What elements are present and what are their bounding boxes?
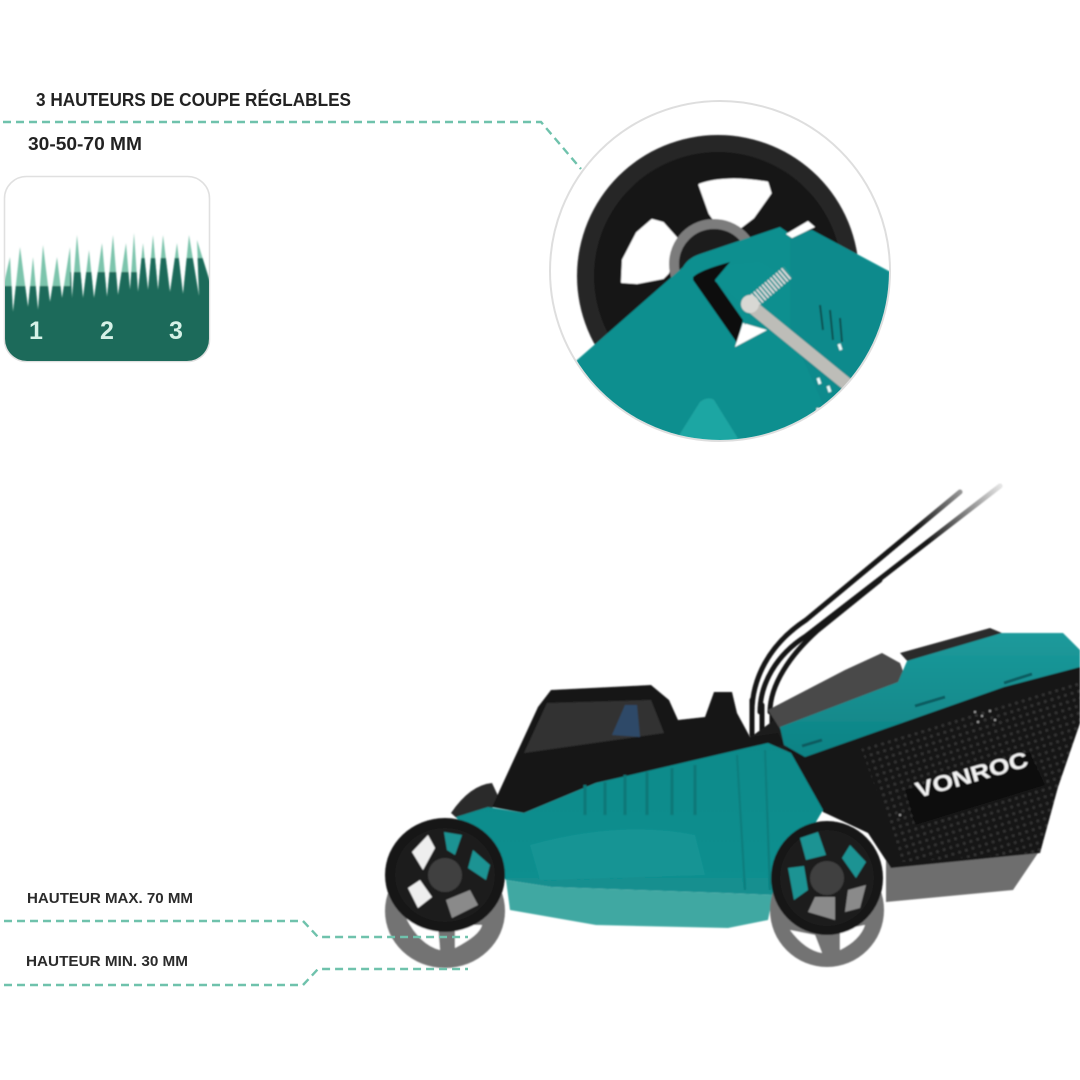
- teal lid: [780, 633, 1080, 757]
- lower skirt (lowered position): [506, 880, 773, 928]
- vent slits: [820, 305, 842, 342]
- level numbers: [29, 317, 183, 345]
- callout line: min height: [4, 969, 468, 985]
- panel: wheel adjuster detail circle: [550, 101, 900, 460]
- icon: grass cutting levels: [4, 176, 210, 365]
- dark underlay joining bag and deck: [740, 670, 900, 780]
- grass bag lower grey base: [886, 850, 1040, 902]
- adjuster slot: [693, 262, 743, 343]
- label: max height: HAUTEUR MAX. 70 MM: [27, 891, 193, 907]
- level numbers: 2: [100, 317, 114, 345]
- far front wheel: [451, 783, 500, 830]
- motor cover: [492, 685, 784, 813]
- rear wheel low ghost: [770, 853, 884, 967]
- level numbers: 1: [29, 317, 43, 345]
- detail wheel: [576, 134, 858, 346]
- callout line to wheel detail: [3, 122, 581, 169]
- spring: [755, 272, 788, 300]
- adjuster rod: [750, 305, 848, 385]
- grass bag perforation: [860, 680, 1080, 862]
- detail mower body: [576, 226, 889, 439]
- teal deck: [456, 743, 823, 895]
- callout line: max height: [4, 921, 468, 937]
- front wheel low ghost: [385, 854, 505, 968]
- text: height values: 30-50-70 MM: [28, 134, 142, 154]
- heading: adjustable cutting heights: 3 HAUTEURS DE COUPE RÉGLABLES: [36, 89, 351, 110]
- handle: [752, 486, 1000, 738]
- brand label: VONROC: [912, 747, 1031, 803]
- label: min height: HAUTEUR MIN. 30 MM: [26, 954, 188, 970]
- level numbers: 3: [169, 317, 183, 345]
- mower illustration: [385, 486, 1080, 968]
- brand label: [905, 747, 1045, 825]
- grass bag black body: [785, 665, 1080, 868]
- motor cover window: [524, 700, 664, 753]
- front wheel: [385, 818, 505, 932]
- rear wheel: [771, 821, 883, 935]
- lower notch: [679, 398, 738, 440]
- lid carry handle: [900, 628, 1002, 663]
- perforation highlight specks: [899, 710, 996, 816]
- grey cover: [768, 653, 910, 735]
